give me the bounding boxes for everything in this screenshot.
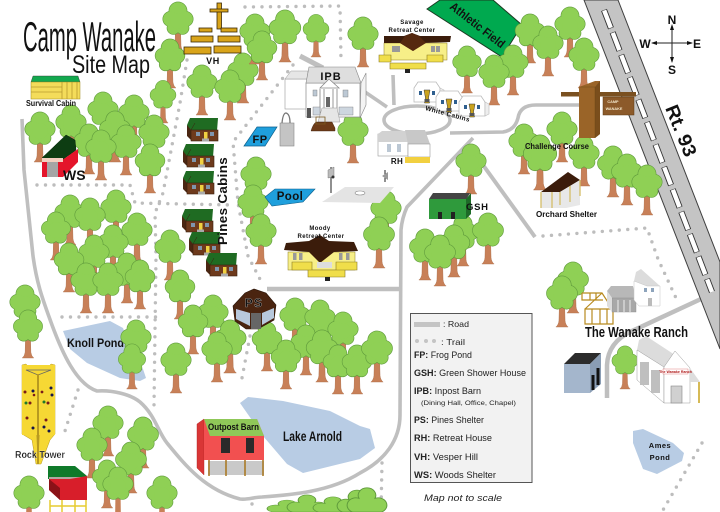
compass: S — [668, 63, 676, 77]
building: lookout tower — [48, 466, 87, 512]
pines cabins — [182, 118, 237, 276]
ames pond — [633, 429, 684, 474]
building: savage retreat center — [379, 20, 451, 73]
title: Site Map — [72, 51, 150, 79]
ames pond: Ames — [649, 441, 671, 450]
legend: abbreviations: WS: Woods Shelter — [414, 470, 496, 480]
legend: abbreviations: PS: Pines Shelter — [414, 415, 484, 425]
building: survival cabin: Survival Cabin — [26, 99, 76, 108]
building: woods shelter: WS — [63, 167, 86, 183]
challenge course tower and camp sign — [561, 81, 636, 138]
trees: central and lake woods — [161, 270, 392, 394]
challenge course tower and camp sign: WANAKE — [606, 107, 623, 111]
building: orchard shelter: Orchard Shelter — [536, 209, 598, 219]
building: retreat house — [378, 130, 430, 166]
compass: E — [693, 37, 701, 51]
frog pond — [244, 127, 277, 146]
legend: abbreviations: GSH: Green Shower House — [414, 368, 526, 378]
legend: abbreviations — [414, 350, 526, 480]
knoll pond: Knoll Pond — [67, 336, 124, 350]
ranch: white barn — [637, 336, 700, 403]
ranch: white house — [634, 269, 660, 306]
legend: abbreviations: VH: Vesper Hill — [414, 452, 478, 462]
legend: trail swatch — [415, 337, 465, 347]
lake arnold — [240, 397, 375, 473]
pool: Pool — [277, 191, 303, 203]
trees: east — [364, 7, 662, 389]
building: inpost barn: IPB — [320, 71, 342, 83]
icon: gray silo — [280, 113, 294, 146]
legend: abbreviations: IPB: Inpost Barn — [414, 386, 481, 396]
trees: west and south — [10, 285, 387, 512]
trees: north woods — [25, 2, 378, 193]
building: white cabins — [414, 82, 489, 124]
legend: abbreviations: (Dining Hall, Office, Chapel) — [421, 400, 516, 407]
ranch: gray barn — [607, 286, 636, 312]
label: the wanake ranch: The Wanake Ranch — [585, 324, 688, 341]
building: moody retreat center: Moody — [309, 226, 331, 232]
ranch: blue shed — [564, 353, 601, 393]
building: vesper hill cross and logs: VH — [206, 56, 220, 66]
knoll pond — [63, 321, 146, 381]
label: route 93: Rt. 93 — [660, 102, 700, 160]
legend: road swatch — [414, 319, 469, 329]
pool — [265, 189, 315, 206]
building: green shower house: GSH — [466, 202, 489, 213]
legend: trail swatch: : Trail — [441, 337, 465, 347]
building: outpost barn — [197, 419, 264, 476]
title — [23, 13, 156, 79]
building: woods shelter — [42, 135, 86, 183]
note: map not to scale: Map not to scale — [424, 493, 502, 503]
ames pond: Pond — [650, 453, 670, 462]
building: orchard shelter — [536, 172, 598, 219]
building: pines shelter — [233, 289, 276, 329]
athletic field: Athletic Field — [447, 0, 508, 51]
building: savage retreat center: Retreat Center — [389, 28, 436, 34]
ranch: fence — [582, 293, 613, 324]
building: white cabins: White Cabins — [424, 105, 471, 124]
building: vesper hill cross and logs — [184, 3, 241, 66]
challenge course tower and camp sign: CAMP — [607, 100, 619, 104]
building: outpost barn: Outpost Barn — [208, 422, 259, 432]
frog pond: FP — [252, 134, 268, 146]
building: green shower house — [429, 193, 489, 219]
route 93 — [584, 0, 720, 349]
compass — [639, 13, 701, 77]
building: retreat house: RH — [391, 157, 403, 166]
basketball court — [322, 167, 394, 203]
trees: pines cluster — [42, 157, 276, 313]
lake arnold: Lake Arnold — [283, 428, 342, 444]
building: pines shelter: PS — [245, 296, 263, 310]
legend: abbreviations: RH: Retreat House — [414, 433, 492, 443]
ranch: white barn: The Wanake Ranch — [659, 370, 692, 374]
building: rock tower — [15, 364, 65, 464]
legend: road swatch: : Road — [443, 319, 469, 329]
building: moody retreat center: Retreat Center — [298, 234, 345, 240]
compass: N — [668, 13, 676, 27]
label: pines cabins: Pines Cabins — [215, 157, 230, 245]
building: rock tower: Rock Tower — [15, 449, 65, 461]
building: moody retreat center — [284, 226, 358, 281]
building: savage retreat center: Savage — [400, 20, 424, 26]
building: survival cabin — [26, 76, 80, 108]
legend — [410, 314, 532, 482]
legend: abbreviations: FP: Frog Pond — [414, 350, 472, 360]
building: inpost barn — [285, 67, 366, 131]
label: challenge course: Challenge Course — [525, 141, 589, 151]
text: Camp Wanake — [23, 13, 156, 60]
compass: W — [639, 37, 651, 51]
